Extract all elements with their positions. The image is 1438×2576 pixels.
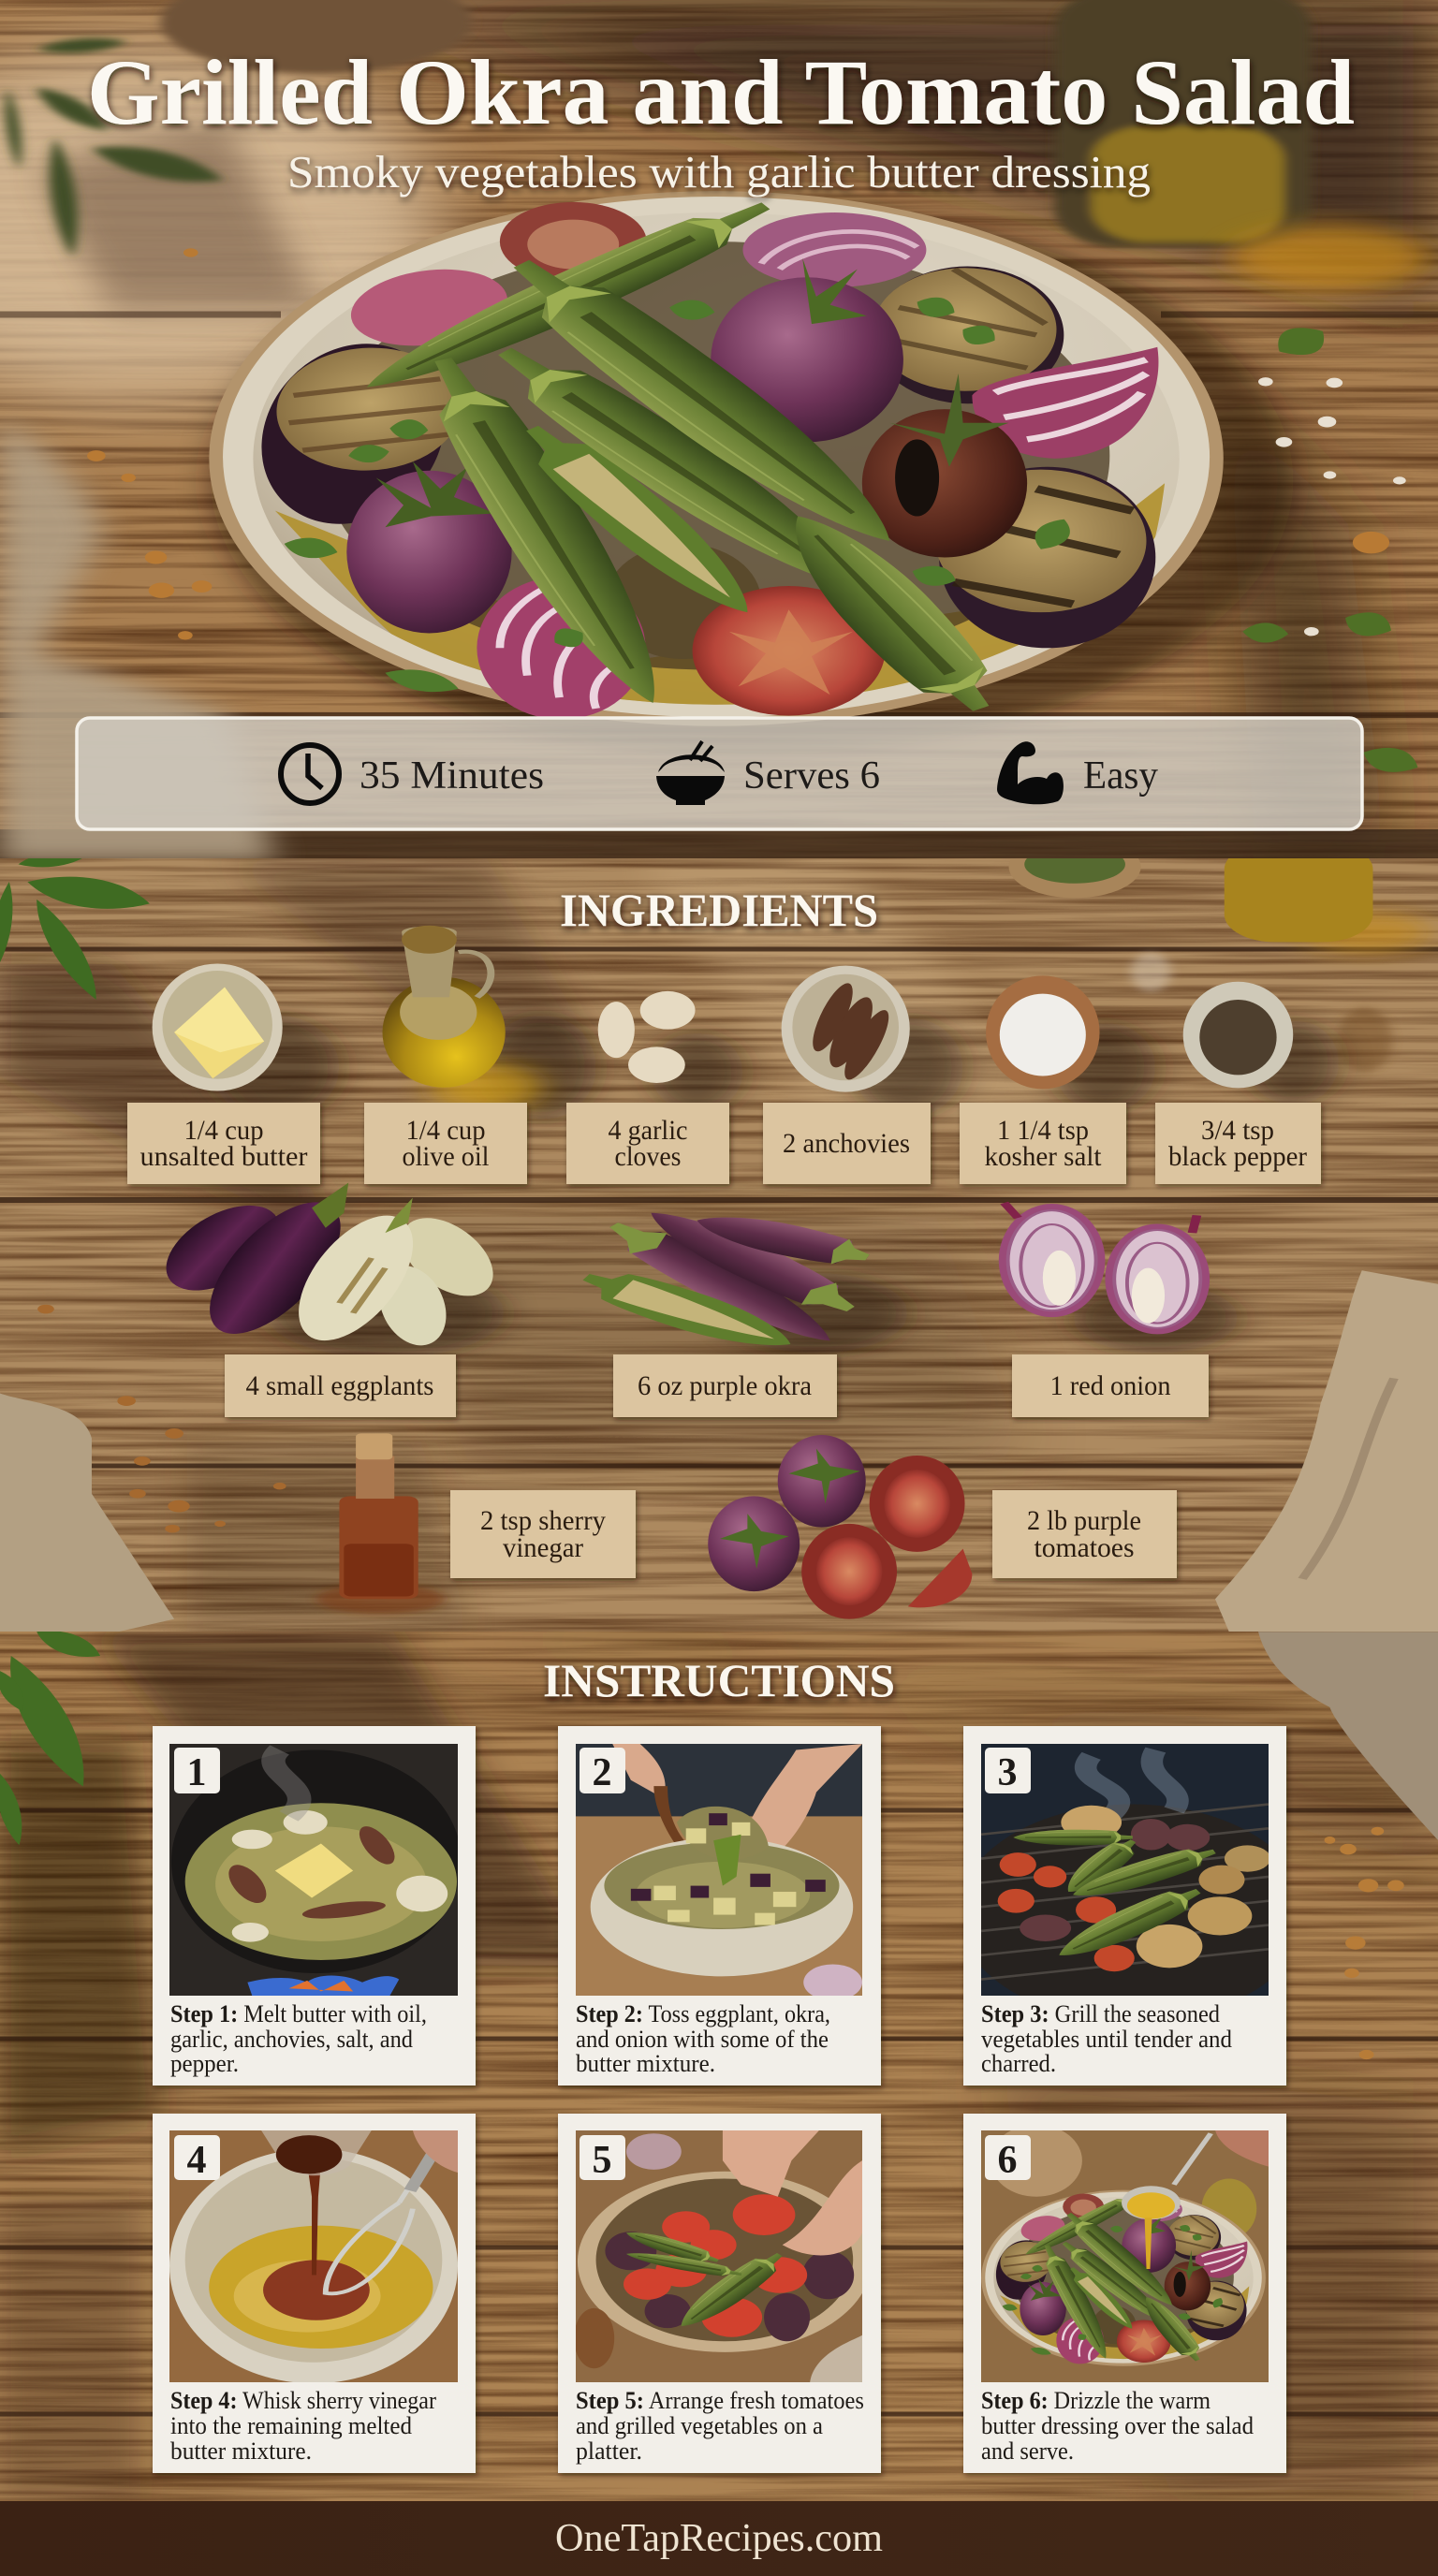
- ingredient label: pepper: [1155, 1103, 1321, 1184]
- step 3 text: charred.: [981, 2050, 1056, 2077]
- tomato slice: [693, 586, 885, 715]
- step 2 text: butter mixture.: [576, 2050, 715, 2077]
- servings: Serves 6: [743, 754, 880, 798]
- step 2 text: and onion with some of the: [576, 2026, 829, 2053]
- instructions heading: INSTRUCTIONS: [543, 1654, 895, 1706]
- step 2 text: [576, 2000, 830, 2077]
- step 2 photo: tossing vegetables: [576, 1744, 862, 1996]
- step 1 text: pepper.: [170, 2050, 239, 2077]
- step 3 text: Step 3: Grill the seasoned: [981, 2000, 1220, 2027]
- leaves: [0, 847, 158, 1002]
- eggplant slice left: [243, 337, 477, 531]
- anchovies bowl: [782, 966, 910, 1092]
- shallot: [331, 256, 527, 359]
- food shadow: [321, 242, 1109, 670]
- step 3 text: vegetables until tender and: [981, 2026, 1232, 2053]
- step 5 text: Step 5: Arrange fresh tomatoes: [576, 2387, 864, 2414]
- step number 3: 3: [998, 1751, 1017, 1794]
- step number 5: [580, 2135, 625, 2182]
- ingredient label: pepper: 3/4 tsp: [1201, 1115, 1274, 1146]
- blurred leaves: [1, 35, 231, 258]
- ingredient label: butter: 1/4 cup: [183, 1115, 264, 1146]
- step 5 text: [576, 2387, 864, 2465]
- step 2 text: Step 2: Toss eggplant, okra,: [576, 2000, 830, 2027]
- butter dish: [153, 963, 283, 1091]
- purple tomato top: [711, 258, 903, 442]
- ingredient label: salt: kosher salt: [985, 1141, 1102, 1172]
- step number 2: 2: [592, 1751, 612, 1794]
- back okra: [345, 189, 786, 403]
- step number 3: [985, 1748, 1031, 1794]
- fresh herbs: [280, 293, 1079, 698]
- oil glow: [1229, 226, 1431, 291]
- step number 5: 5: [592, 2139, 612, 2182]
- clock icon: [281, 745, 339, 803]
- linen napkins: [0, 1270, 1438, 1632]
- step 4 text: butter mixture.: [170, 2437, 312, 2465]
- step card 6: [963, 2114, 1286, 2473]
- ingredient label: onion: [1012, 1354, 1209, 1417]
- salt and pepper scatter: [1131, 952, 1392, 1073]
- butter dressing puddle: [275, 483, 1165, 720]
- oil jar: [1225, 842, 1431, 952]
- step 1 photo: butter in pan: [169, 1744, 458, 1996]
- flexed arm icon: [997, 741, 1064, 804]
- ingredient label: butter: unsalted butter: [140, 1141, 308, 1172]
- object shadows: [211, 1015, 1339, 1358]
- subtitle: Smoky vegetables with garlic butter dressing: [287, 146, 1151, 198]
- grilled tomato: [862, 373, 1027, 558]
- step card 4: [153, 2114, 476, 2473]
- eggplant slice bottom right: [935, 467, 1155, 648]
- red onion bottom: [477, 577, 646, 720]
- back onion: [742, 212, 926, 287]
- difficulty: Easy: [1083, 754, 1158, 798]
- ingredient label: tomatoes: [992, 1490, 1177, 1578]
- ingredient illustrations: [0, 836, 1438, 1632]
- ingredient label: salt: [960, 1103, 1126, 1184]
- ingredient label: olive oil: olive oil: [403, 1141, 489, 1172]
- step 5 photo: arranging tomatoes: [576, 2130, 862, 2382]
- olive oil jug: [382, 926, 541, 1113]
- step 4 photo: whisking vinegar into butter: [169, 2130, 458, 2382]
- time: 35 Minutes: [360, 754, 544, 798]
- step 6 text: Step 6: Drizzle the warm: [981, 2387, 1211, 2414]
- eggplant slice center: [606, 544, 761, 659]
- bowl icon: [656, 741, 725, 805]
- step 4 text: [170, 2387, 436, 2465]
- crumbs and herbs on table: [87, 248, 1426, 778]
- ingredient label: butter: [127, 1103, 320, 1184]
- ingredients wood background: [0, 858, 1438, 1632]
- step card 1: [153, 1726, 476, 2086]
- ingredient label: salt: 1 1/4 tsp: [997, 1115, 1089, 1146]
- purple okra: [569, 1201, 877, 1360]
- plate shadow: [211, 206, 1293, 755]
- garlic cloves: [598, 991, 696, 1083]
- step number 6: 6: [998, 2139, 1017, 2182]
- ingredients heading: INGREDIENTS: [560, 884, 878, 936]
- section: ingredients: [0, 836, 1438, 1632]
- small bowl of herbs: [1009, 836, 1141, 898]
- hero scene in scaled coordinates: [0, 0, 1431, 861]
- step number 6: [985, 2135, 1031, 2182]
- step number 1: [174, 1748, 220, 1794]
- ingredient label: tomatoes: tomatoes: [1034, 1532, 1135, 1563]
- step 6 text: [981, 2387, 1254, 2465]
- olive oil bottle: [1055, 0, 1312, 247]
- info panel: [77, 718, 1362, 829]
- step 6 photo: drizzling dressing: [981, 2130, 1269, 2382]
- step 1 text: Step 1: Melt butter with oil,: [170, 2000, 427, 2027]
- step number 1: 1: [187, 1751, 206, 1794]
- step 4 text: Step 4: Whisk sherry vinegar: [170, 2387, 436, 2414]
- napkin: [0, 417, 275, 861]
- step number 2: [580, 1748, 625, 1794]
- small bowl top: [160, 0, 472, 74]
- step 6 text: butter dressing over the salad: [981, 2412, 1254, 2439]
- step 5 text: platter.: [576, 2437, 642, 2465]
- plate: [209, 191, 1224, 726]
- title: Grilled Okra and Tomato Salad: [87, 40, 1355, 144]
- ingredient label: olive oil: 1/4 cup: [406, 1115, 485, 1146]
- leaves, napkin, crumbs: [0, 1623, 1438, 2059]
- hero wood background: [0, 0, 1438, 858]
- step 1 text: [170, 2000, 427, 2077]
- step card 5: [558, 2114, 881, 2473]
- step 1 text: garlic, anchovies, salt, and: [170, 2026, 413, 2053]
- ingredient label: onion: 1 red onion: [1050, 1370, 1170, 1401]
- ingredient label: eggplants: 4 small eggplants: [245, 1370, 434, 1401]
- salt bowl: [986, 975, 1100, 1089]
- section: instructions: [0, 1623, 1438, 2501]
- eggplants: [142, 1183, 511, 1348]
- crumbs: [37, 1305, 286, 1532]
- ingredient label: garlic: 4 garlic: [609, 1115, 687, 1146]
- step 6 text: and serve.: [981, 2437, 1074, 2465]
- step 3 text: [981, 2000, 1232, 2077]
- eggplant slice top right: [872, 267, 1064, 403]
- purple tomatoes: [708, 1435, 972, 1619]
- vinegar bottle: [316, 1433, 445, 1614]
- step card 2: [558, 1726, 881, 2086]
- dish: plate with grilled vegetables: [209, 189, 1224, 726]
- pepper bowl: [1183, 982, 1293, 1088]
- onion halves: [999, 1203, 1210, 1334]
- footer: [0, 2501, 1438, 2576]
- ingredient label: anchovies: 2 anchovies: [783, 1128, 910, 1159]
- ingredient label: vinegar: 2 tsp sherry: [480, 1505, 606, 1536]
- website: OneTapRecipes.com: [555, 2517, 883, 2560]
- purple tomato left: [346, 461, 512, 633]
- ingredient label: pepper: black pepper: [1168, 1141, 1307, 1172]
- step number 4: [174, 2135, 220, 2182]
- ingredient label: garlic: [566, 1103, 729, 1184]
- ingredient label: anchovies: [763, 1103, 931, 1184]
- ingredient label: tomatoes: 2 lb purple: [1027, 1505, 1141, 1536]
- ingredient label: garlic: cloves: [614, 1141, 682, 1172]
- ingredient label: olive oil: [364, 1103, 527, 1184]
- step number 4: 4: [187, 2139, 206, 2182]
- ingredient label: okra: 6 oz purple okra: [638, 1370, 812, 1401]
- back tomato: [500, 202, 647, 281]
- ingredient label: eggplants: [225, 1354, 456, 1417]
- step 3 photo: vegetables on grill: [981, 1744, 1269, 1996]
- instructions wood background: [0, 1632, 1438, 2501]
- section: hero: [0, 0, 1438, 861]
- step 5 text: and grilled vegetables on a: [576, 2412, 823, 2439]
- step card 3: [958, 1726, 1307, 2086]
- ingredient label: vinegar: [450, 1490, 636, 1578]
- ingredient label: vinegar: vinegar: [503, 1532, 583, 1563]
- ingredient label: okra: [613, 1354, 837, 1417]
- okra pods: [402, 245, 1020, 722]
- step 4 text: into the remaining melted: [170, 2412, 412, 2439]
- red onion wedge: [972, 347, 1158, 459]
